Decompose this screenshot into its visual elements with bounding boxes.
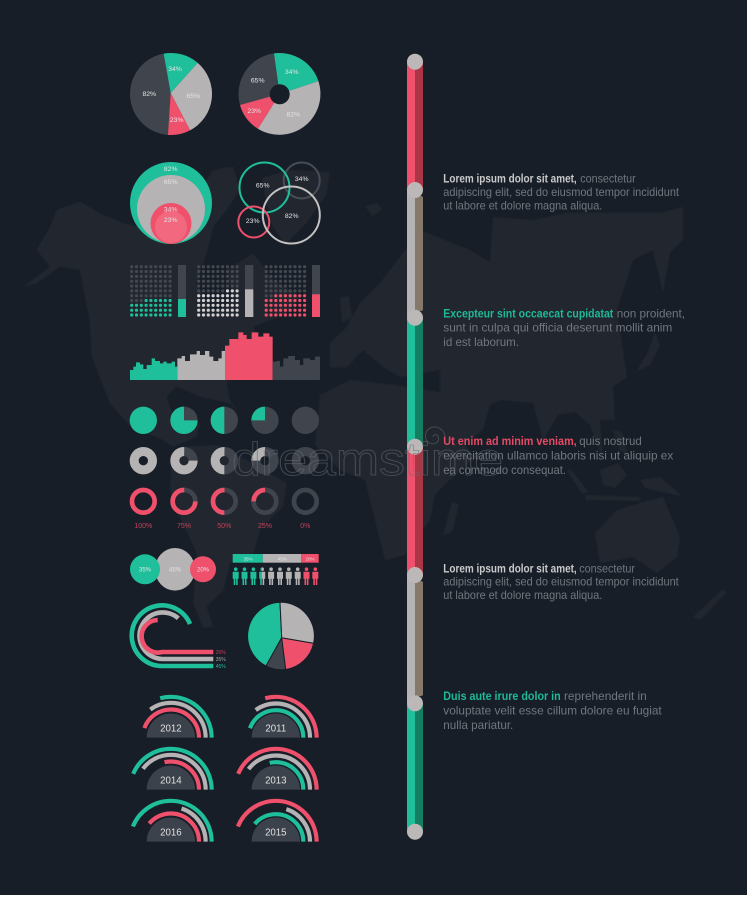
overlapping ring circles: 23% [246,218,260,225]
watermark: dreamstime [232,433,503,485]
stepped area chart [130,332,320,380]
text block 2: Excepteur sint occaecat cupidatat [443,306,613,320]
text block 3: ea commodo consequat. [443,463,566,477]
gauge 2016: 2016 [160,827,182,838]
pie chart 2 with hole [238,53,320,135]
text block 2 [443,306,685,349]
text block 3 [443,434,673,477]
text block 4 [443,561,679,602]
text block 2: sunt in culpa qui officia deserunt mollit anim [443,321,672,335]
nested circles: 82% [164,166,178,173]
concentric track chart: 35% [216,657,226,663]
gauge 2013 [235,749,317,790]
text block 4: Lorem ipsum dolor sit amet, [443,561,577,575]
text block 1: consectetur [580,172,636,186]
gauge 2014 [130,749,212,790]
stacked percentage bar: 45% [278,556,287,561]
overlapping ring circles: 34% [295,176,309,183]
text block 2: non proident, [617,306,685,320]
percentage donuts row: gray [134,451,314,470]
bubble chart [130,548,216,591]
percentage labels: 50% [217,523,231,530]
dot grid chart 2 [199,267,237,315]
concentric track chart: 20% [216,650,226,656]
gauge 2013: 2013 [265,775,287,786]
stacked percentage bar: 20% [305,556,315,561]
text block 5 [443,689,662,732]
people pictogram [233,567,318,585]
pie chart 2 with hole: 82% [286,112,300,118]
bubble chart: 20% [197,568,210,574]
level bar 2 [245,265,253,317]
gauge 2012: 2012 [160,723,182,734]
stacked percentage bar [233,554,319,563]
text block 1: ut labore et dolore magna aliqua. [443,198,602,212]
gauge 2015: 2015 [265,827,287,838]
stacked percentage bar: 35% [243,556,253,561]
percentage labels [134,523,310,530]
text block 4: ut labore et dolore magna aliqua. [443,588,602,602]
concentric track chart: 45% [216,664,226,670]
dot grid chart 1 [132,267,170,315]
pie chart 2 with hole: 65% [251,78,265,84]
pie chart 1: 34% [168,66,182,73]
overlapping ring circles [238,162,320,244]
text block 5: nulla pariatur. [443,718,513,732]
text block 5: voluptate velit esse cillum dolore eu fugiat [443,704,662,718]
gauge 2011 [235,697,317,738]
text block 4: adipiscing elit, sed do eiusmod tempor incididunt [443,575,679,589]
percentage rings row: pink [132,490,317,513]
text block 3: quis nostrud [579,434,642,448]
large pie chart [248,602,314,670]
gauge 2012 [130,697,212,738]
percentage pies row: teal [130,407,319,434]
percentage labels: 25% [258,523,272,530]
nested circles: 34% [164,206,178,214]
percentage labels: 100% [134,523,152,530]
concentric track chart [132,605,226,670]
gauge 2015 [235,801,317,842]
nested circles [130,162,212,244]
text block 4: consectetur [579,561,635,575]
pie chart 1: 65% [186,93,200,100]
nested circles: 23% [164,217,178,224]
gauge 2014: 2014 [160,775,182,786]
pie chart 1: 82% [142,91,156,98]
pie chart 1 [130,53,212,135]
overlapping ring circles: 82% [285,213,299,220]
text block 1: adipiscing elit, sed do eiusmod tempor incididunt [443,185,680,199]
bubble chart: 35% [139,568,152,574]
pie chart 2 with hole: 34% [285,69,299,76]
level bar 3 [312,265,320,317]
level bar 1 [178,265,186,317]
text block 5: reprehenderit in [564,689,647,703]
text block 3: exercitation ullamco laboris nisi ut aliquip ex [443,448,673,462]
nested circles: 65% [164,179,178,186]
percentage labels: 75% [177,523,191,530]
text block 3: Ut enim ad minim veniam, [443,434,577,448]
text block 1: Lorem ipsum dolor sit amet, [443,172,577,186]
bubble chart: 45% [169,568,182,574]
pie chart 1: 23% [170,117,184,124]
gauge 2011: 2011 [265,723,286,734]
text block 1 [443,172,680,212]
pie chart 2 with hole: 23% [247,108,261,115]
vertical timeline [407,54,423,840]
text block 2: id est laborum. [443,335,519,349]
dot grid chart 3 [266,267,305,315]
text block 5: Duis aute irure dolor in [443,689,561,703]
gauge 2016 [130,801,212,842]
percentage labels: 0% [300,523,310,530]
overlapping ring circles: 65% [256,182,270,190]
world map backdrop [23,167,727,628]
